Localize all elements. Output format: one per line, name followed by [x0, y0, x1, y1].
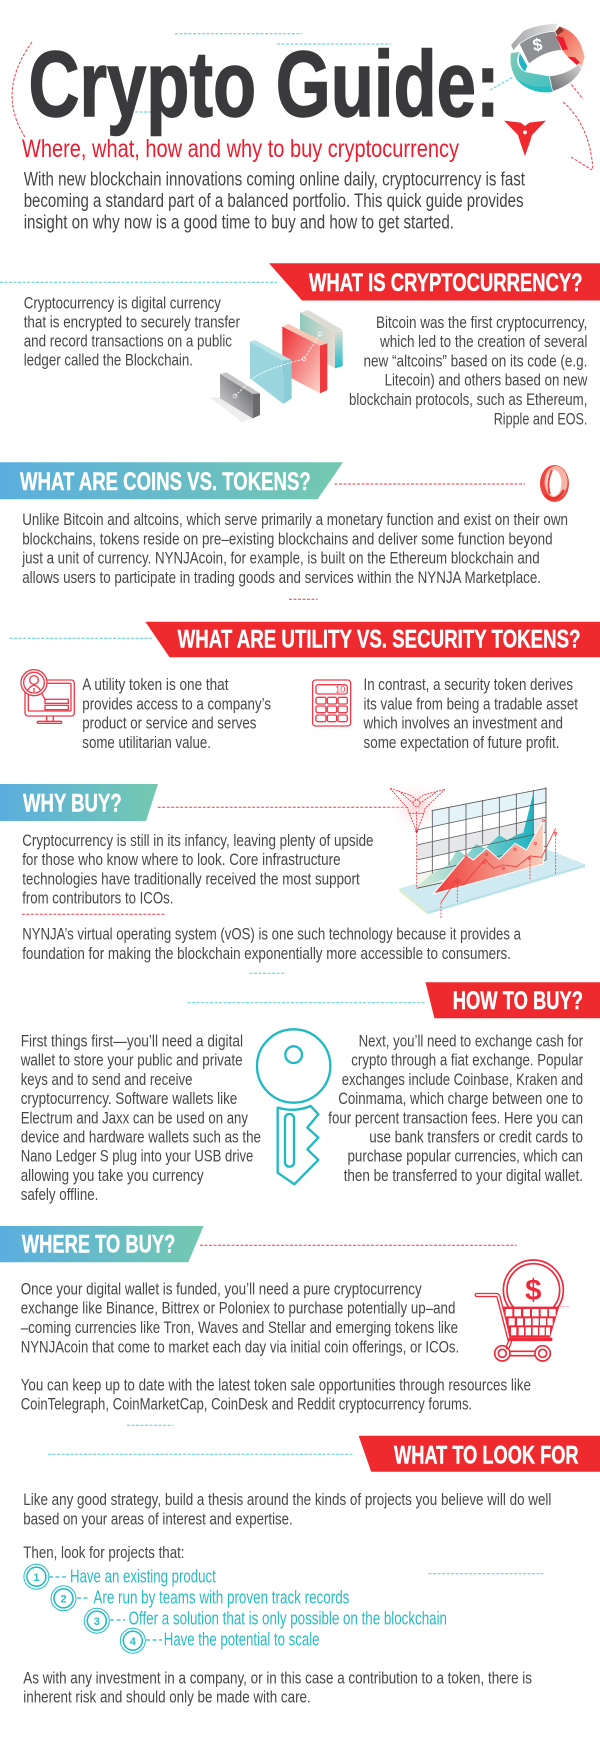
- chart: crypto price graph: [385, 778, 585, 918]
- text: risk note: [23, 1668, 532, 1707]
- heading banner: WHERE TO BUY?: [22, 1230, 175, 1258]
- text: digital wallet: keys and to send and receive: [21, 1070, 193, 1089]
- text: digital wallet: allowing you take you currency: [21, 1166, 204, 1185]
- item 4: [120, 1628, 320, 1653]
- intro text: [24, 169, 526, 234]
- text: risk note: inherent risk and should only be made with care.: [23, 1688, 311, 1707]
- icon: calculator: [313, 680, 351, 726]
- text: digital wallet: safely offline.: [21, 1185, 98, 1204]
- text: digital wallet: cryptocurrency. Software wallets like: [21, 1089, 237, 1108]
- item 3: [84, 1608, 447, 1633]
- text: bitcoin: [349, 313, 588, 428]
- panel: what to look for: [23, 1436, 600, 1707]
- text: utility token: [82, 675, 271, 752]
- item 3: 3: [94, 1616, 100, 1628]
- text: utility token: some utilitarian value.: [82, 733, 211, 752]
- intro text: insight on why now is a good time to buy and how to get started.: [24, 213, 454, 234]
- panel: where to buy: [0, 1226, 569, 1425]
- text: resources: CoinTelegraph, CoinMarketCap, CoinDesk and Reddit cryptocurrency forums.: [21, 1395, 472, 1414]
- panel: how to buy: [20, 982, 600, 1204]
- icon: blockchain plates: [210, 310, 343, 422]
- icon: coin ring: [510, 23, 585, 92]
- icon: coin ring: $: [531, 34, 544, 55]
- panel: coins vs tokens: [0, 462, 569, 599]
- text: utility token: A utility token is one that: [82, 675, 229, 694]
- item 1: 1: [33, 1572, 39, 1584]
- list: four criteria: [24, 1564, 447, 1653]
- text: fiat exchange: [328, 1031, 583, 1185]
- text: security token: [363, 675, 578, 752]
- text: NYNJA vOS: [22, 925, 521, 963]
- text: definition: that is encrypted to securely transfer: [24, 312, 240, 331]
- text: definition: and record transactions on a public: [24, 331, 232, 350]
- text: why buy: technologies have traditionally received the most support: [22, 869, 360, 888]
- text: digital wallet: First things first—you’ll need a digital: [21, 1031, 243, 1050]
- text: resources: [21, 1375, 531, 1414]
- item 3: Offer a solution that is only possible on the blockchain: [129, 1608, 447, 1628]
- item 4: 4: [130, 1636, 137, 1648]
- header decoration: dashed lines: [12, 34, 593, 170]
- panel: what is cryptocurrency: [0, 263, 600, 428]
- text: definition: Cryptocurrency is digital currency: [24, 293, 221, 312]
- text: strategy: Then, look for projects that:: [23, 1543, 184, 1562]
- icon: key: [257, 1029, 330, 1184]
- text: why buy: [22, 831, 373, 908]
- icon: shopping cart with dollar coin: [477, 1260, 569, 1361]
- text: definition: ledger called the Blockchain.: [24, 351, 193, 370]
- heading banner: [0, 784, 158, 821]
- text: digital wallet: device and hardware wallets such as the: [21, 1127, 261, 1146]
- item 2: [51, 1586, 349, 1611]
- icon: shopping cart with dollar coin: $: [525, 1274, 541, 1307]
- text: utility token: provides access to a company’s: [82, 694, 271, 713]
- text: digital wallet: Nano Ledger S plug into your USB drive: [21, 1147, 253, 1166]
- text: exchanges: Once your digital wallet is funded, you’ll need a pure cryptocurrency: [21, 1280, 422, 1299]
- heading banner: [426, 982, 600, 1018]
- text: digital wallet: Electrum and Jaxx can be used on any: [21, 1108, 248, 1127]
- text: why buy: from contributors to ICOs.: [22, 889, 173, 908]
- text: digital wallet: wallet to store your public and private: [20, 1051, 243, 1070]
- heading banner: [0, 1226, 204, 1262]
- text: strategy: based on your areas of interest and expertise.: [23, 1509, 293, 1528]
- text: exchanges: –coming currencies like Tron, Waves and Stellar and emerging tokens like: [21, 1318, 458, 1337]
- text: why buy: Cryptocurrency is still in its infancy, leaving plenty of upside: [22, 831, 373, 850]
- heading banner: [359, 1436, 600, 1472]
- icon: red coin: [540, 465, 569, 502]
- text: exchanges: exchange like Binance, Bittrex or Poloniex to purchase potentially up–and: [21, 1299, 455, 1318]
- heading banner: [269, 263, 600, 300]
- heading banner: [0, 462, 343, 499]
- heading banner: WHY BUY?: [23, 789, 122, 817]
- item 2: 2: [60, 1594, 67, 1606]
- icon: monitor with lock: [21, 670, 74, 723]
- subtitle: Where, what, how and why to buy cryptocurrency: [22, 135, 459, 163]
- text: definition: [24, 293, 240, 370]
- panel: utility vs security tokens: [10, 622, 600, 752]
- item 1: Have an existing product: [70, 1566, 216, 1586]
- text: digital wallet: [20, 1031, 261, 1204]
- text: exchanges: [21, 1280, 459, 1356]
- icon: calculator: 10: [335, 685, 345, 695]
- item 1: [24, 1564, 216, 1589]
- panel: why buy: [0, 778, 585, 973]
- heading banner: WHAT ARE COINS VS. TOKENS?: [20, 468, 311, 496]
- text: coins vs tokens: [21, 510, 568, 587]
- item 4: Have the potential to scale: [164, 1629, 320, 1649]
- text: why buy: for those who know where to look. Core infrastructure: [22, 850, 341, 869]
- item 2: Are run by teams with proven track records: [93, 1587, 349, 1607]
- text: utility token: product or service and serves: [82, 714, 256, 733]
- text: exchanges: NYNJAcoin that come to market each day via initial coin offerings, or ICOs.: [21, 1337, 459, 1356]
- text: strategy: [23, 1490, 551, 1562]
- icon: red shuriken logo: [504, 121, 546, 156]
